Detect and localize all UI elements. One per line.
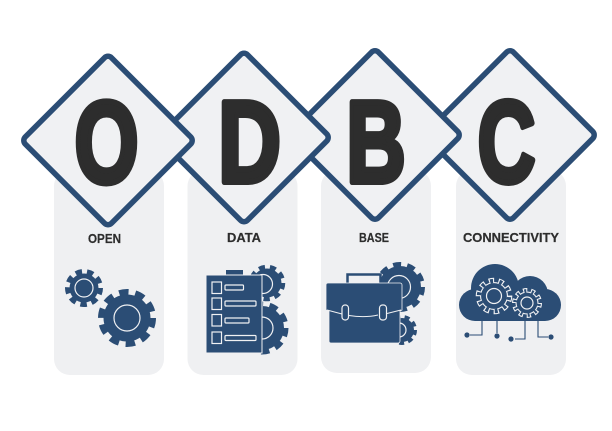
panel: open (54, 170, 164, 375)
label: OPEN: OPEN (88, 231, 121, 246)
letter C: C (478, 78, 535, 208)
icon: two gears (68, 272, 153, 344)
letter B: B (346, 78, 406, 207)
icon: cloud with gears and circuit nodes (459, 264, 561, 342)
icon: briefcase and gears (326, 264, 422, 343)
panel: base (321, 170, 431, 373)
diamond tile: B (289, 49, 461, 221)
label: DATA: DATA (227, 230, 262, 245)
icon: checklist and gears (206, 267, 286, 353)
diamond tile: O (22, 54, 194, 227)
label: CONNECTIVITY: CONNECTIVITY (463, 230, 559, 245)
letter O: O (74, 79, 139, 208)
panel: data (188, 170, 298, 375)
diamond tile: D (158, 51, 330, 224)
label: BASE: BASE (359, 230, 389, 245)
letter D: D (218, 77, 281, 207)
diamond tile: C (424, 49, 596, 221)
panel: connectivity (456, 170, 566, 375)
